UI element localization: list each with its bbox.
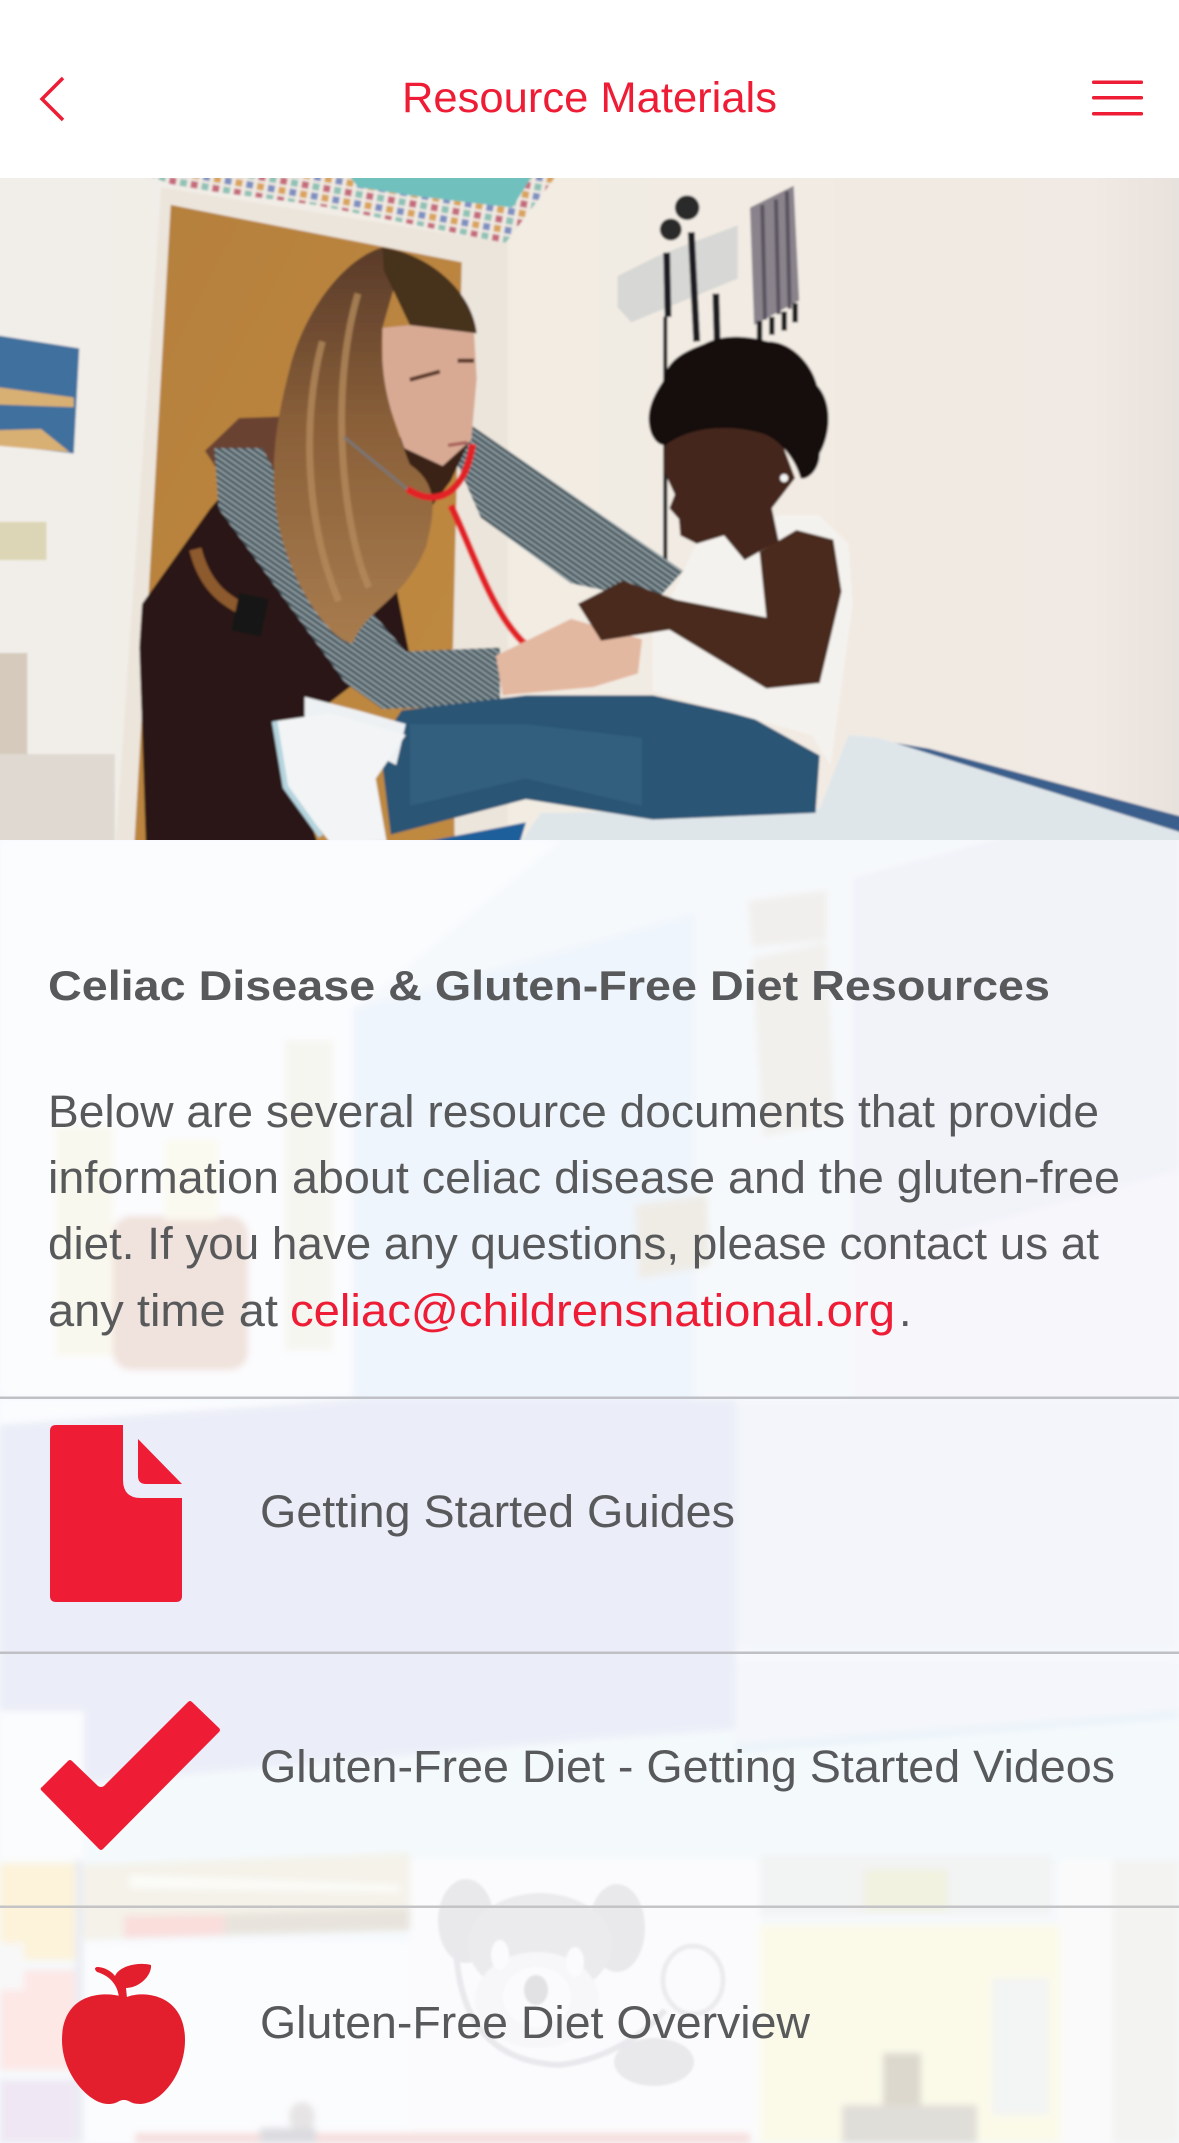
woman sleeve near: [214, 448, 500, 709]
row: getting started guides: [50, 1425, 735, 1602]
row label: Gluten-Free Diet - Getting Started Videos: [260, 1741, 1115, 1792]
wall diagnostic set: [617, 225, 738, 322]
icon: hamburger menu: [1092, 80, 1143, 116]
woman hand: [496, 619, 642, 695]
row: getting started videos: [41, 1701, 1115, 1850]
body paragraph: .: [899, 1285, 912, 1336]
body paragraph: [48, 1086, 1120, 1336]
woman sleeve far: [458, 426, 683, 601]
woman dress: [139, 437, 410, 854]
child shirt: [653, 515, 852, 765]
row dividers: [0, 1396, 1179, 1908]
child arm: [578, 530, 842, 689]
body paragraph: information about celiac disease and the gluten-free: [48, 1152, 1120, 1203]
door: [134, 205, 462, 854]
child hair: [649, 337, 829, 479]
heading: Celiac Disease & Gluten-Free Diet Resources: [48, 962, 1050, 1009]
body paragraph: any time at: [48, 1285, 279, 1336]
window strip: [83, 1853, 410, 1940]
decorative border and ceiling: [152, 178, 556, 244]
icon: back arrow: [42, 78, 63, 120]
email link: celiac@childrensnational.org: [290, 1285, 895, 1336]
body paragraph: diet. If you have any questions, please contact us at: [48, 1218, 1100, 1269]
child head: [664, 417, 795, 560]
stethoscope: [344, 437, 407, 489]
photo: doctor examining child: [0, 164, 1179, 854]
icon: check mark: [41, 1701, 220, 1850]
row label: Gluten-Free Diet Overview: [260, 1997, 811, 2048]
exam table: [896, 742, 1179, 834]
light switch: [0, 522, 46, 560]
shoes: [305, 697, 406, 765]
background: blurred lobby photo: [0, 790, 1179, 2143]
neck and face: [399, 437, 470, 506]
icon: apple: [62, 1964, 185, 2104]
row: gluten-free diet overview: [62, 1964, 811, 2104]
row label: Getting Started Guides: [260, 1486, 735, 1537]
hair: [274, 247, 433, 643]
title: Resource Materials: [402, 74, 777, 122]
jeans: [380, 695, 820, 835]
body paragraph: Below are several resource documents that provide: [48, 1086, 1099, 1137]
bear mural: [438, 1879, 723, 2086]
wall art: [0, 335, 79, 454]
header bar: [0, 0, 1179, 178]
icon: document: [50, 1425, 182, 1602]
